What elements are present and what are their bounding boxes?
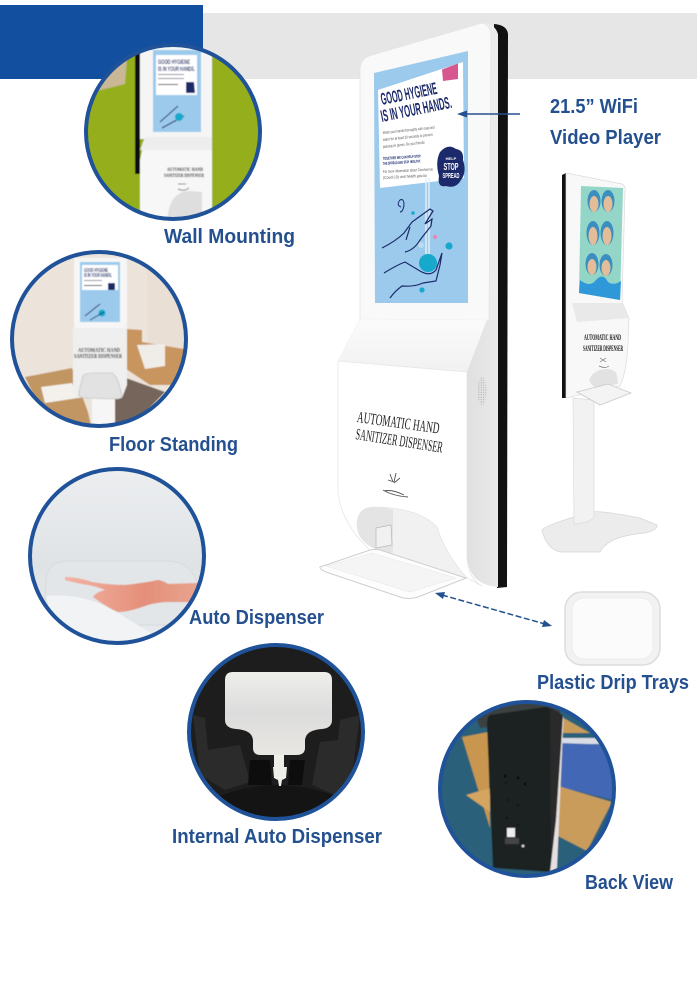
- header banner: blue block: [0, 5, 203, 79]
- label: back view: Back View: [585, 872, 673, 894]
- water stream: [426, 178, 429, 262]
- poster body text: water for at least 20 seconds to prevent: [383, 132, 433, 142]
- drip tray product image: [565, 592, 660, 665]
- label: [583, 333, 623, 353]
- side panel of the display: [470, 23, 498, 330]
- display and body: [566, 173, 629, 398]
- dispenser shoulder: [338, 319, 487, 372]
- poster body text: Wash your hands thoroughly with soap and: [383, 125, 435, 135]
- display: [140, 44, 212, 139]
- drip tray: [577, 384, 631, 405]
- stop the spread blob: SPREAD: [442, 173, 460, 180]
- pole: [573, 398, 594, 524]
- stop the spread blob: [437, 147, 465, 187]
- circle: auto dispenser: [28, 467, 206, 650]
- wall plaque: [98, 60, 128, 92]
- label: wall mounting: Wall Mounting: [164, 226, 295, 248]
- screen: IS IN YOUR HANDS.: [379, 93, 453, 126]
- rear sticker: [507, 828, 515, 837]
- left bench wood: [24, 368, 91, 424]
- label: floor standing: Floor Standing: [109, 434, 238, 456]
- circle: floor standing: SANITIZER DISPENSER: [74, 354, 122, 360]
- soap ball: [419, 254, 437, 272]
- circle: floor standing: IS IN YOUR HANDS.: [84, 273, 112, 279]
- mounting bracket: [376, 525, 392, 548]
- product label: SANITIZER DISPENSER: [354, 426, 444, 457]
- screen water: [579, 276, 621, 300]
- tray: [79, 373, 122, 399]
- stop the spread blob: STOP: [444, 162, 459, 173]
- circle: back view: [438, 700, 616, 878]
- drip tray: [320, 550, 466, 598]
- poster body text: passing on germs. Be your friends: [383, 140, 425, 149]
- side body panel: [467, 320, 498, 587]
- hand icon: [599, 358, 609, 368]
- circle: floor standing: [10, 250, 188, 430]
- line-art hands: [382, 209, 442, 298]
- circle: floor standing: AUTOMATIC HAND: [78, 348, 120, 354]
- sanitizer tank: [225, 672, 332, 755]
- hand: [65, 577, 198, 612]
- cut-out: [357, 507, 467, 578]
- poster body text: TOGETHER WE CAN HELP STOP: [383, 153, 421, 161]
- screen: [579, 186, 623, 300]
- poster body text: THE SPREAD AND STAY HEALTHY.: [383, 158, 421, 166]
- screen hand panels: [586, 190, 614, 276]
- wood table: [462, 732, 490, 828]
- dispenser front: [338, 361, 482, 586]
- product label: [354, 409, 444, 457]
- cut-out: [589, 369, 618, 388]
- housing ribs: [193, 715, 250, 790]
- screen: [374, 51, 468, 303]
- product display: [74, 258, 127, 330]
- marble block: [137, 344, 165, 369]
- dispenser gloss: [46, 596, 151, 641]
- label: internal auto dispenser: Internal Auto Dispenser: [172, 826, 382, 848]
- body: [139, 149, 213, 217]
- base: [542, 512, 657, 552]
- black back edge: [494, 24, 508, 588]
- spiral mark: [398, 200, 404, 212]
- main product: wall-style dispenser: [320, 23, 508, 598]
- poster body text: (Covid-19) visit health.gov.au: [383, 173, 427, 180]
- poster heading: [379, 79, 453, 126]
- floor-standing product: SANITIZER DISPENSER: [583, 344, 623, 353]
- white poster panel: [378, 62, 464, 188]
- stop the spread blob: HELP: [446, 156, 457, 161]
- label: 21.5 inch WiFi video player: Video Player: [550, 127, 661, 149]
- circle: wall mounting: [85, 44, 261, 222]
- label: auto dispenser: Auto Dispenser: [189, 607, 324, 629]
- circle: floor standing: GOOD HYGIENE: [84, 268, 108, 274]
- pole: [92, 398, 116, 424]
- hand icon: [383, 473, 408, 497]
- product label: AUTOMATIC HAND: [356, 409, 441, 438]
- floor-standing product: [542, 173, 657, 552]
- product body: [73, 328, 127, 398]
- top wall: [477, 704, 560, 728]
- label: 21.5 inch WiFi video player: 21.5” WiFi: [550, 96, 638, 118]
- black rear panel: [487, 707, 553, 872]
- label: 21.5 inch WiFi video player: [550, 96, 661, 149]
- speaker grille: [478, 377, 486, 405]
- dashed double-headed arrow: [435, 592, 552, 627]
- droplets: [411, 211, 453, 293]
- circle: wall mounting: GOOD HYGIENE: [158, 60, 190, 66]
- nozzle: [273, 755, 287, 786]
- poster body text: For more information about Coronavirus: [383, 166, 433, 174]
- floor: [114, 378, 166, 422]
- black edge: [562, 173, 566, 398]
- label: plastic drip trays: Plastic Drip Trays: [537, 672, 689, 694]
- circle: wall mounting: IS IN YOUR HANDS.: [158, 67, 195, 73]
- side edge: [550, 708, 563, 872]
- white box: [41, 383, 78, 403]
- poster heading: GOOD HYGIENE: [379, 79, 439, 109]
- screw holes: [504, 774, 526, 826]
- dispenser opening: [44, 561, 198, 625]
- pink tag: [442, 64, 458, 81]
- arrow: screen callout: [457, 110, 520, 118]
- circle: internal auto dispenser: [188, 644, 364, 825]
- header banner: grey band: [203, 13, 697, 79]
- label: AUTOMATIC HAND: [584, 333, 621, 342]
- right steps wood: [126, 329, 184, 385]
- circle: wall mounting: AUTOMATIC HAND: [167, 167, 203, 173]
- carpet right: [560, 738, 614, 744]
- front panel of the display: [360, 23, 491, 322]
- black strip: [135, 44, 140, 174]
- carpet: [442, 710, 612, 874]
- circle: wall mounting: SANITIZER DISPENSER: [164, 173, 205, 179]
- poster body text: [383, 125, 435, 180]
- shoulder: [572, 303, 629, 322]
